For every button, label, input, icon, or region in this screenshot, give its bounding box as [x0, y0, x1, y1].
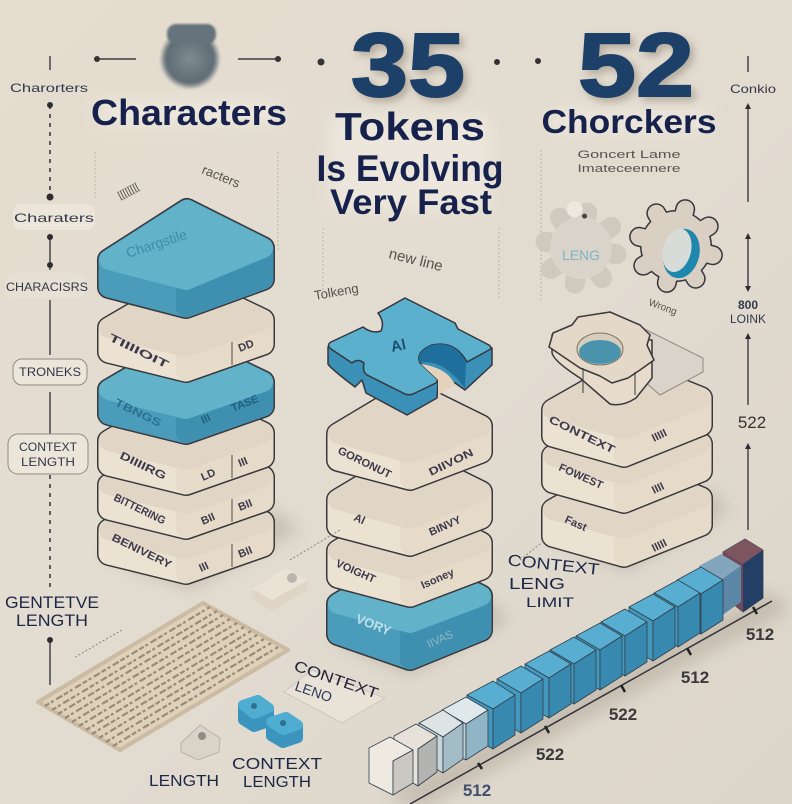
label: context length lower [5, 593, 99, 630]
bar 7 [525, 651, 571, 718]
label: context length: LENGTH [243, 774, 311, 791]
icon: rough gear with leng [539, 197, 624, 290]
heading: tokens is evolving very fast: Tokens [335, 106, 485, 149]
slab 1 blue top: Chargstile [124, 226, 189, 261]
number: 52: 52 [578, 16, 694, 116]
label: characters pill: Charaters [14, 211, 94, 225]
label: 522: 522 [738, 413, 766, 432]
label: 800 loink: LOINK [730, 312, 766, 326]
label card: context leno [284, 658, 385, 723]
icon: blue puzzle piece [328, 298, 492, 415]
annotations above stacks: [[[[[[[[ [116, 181, 141, 202]
slab tan voiight: Isoney [419, 566, 457, 592]
heading: tokens is evolving very fast [316, 106, 504, 222]
axis labels: 512 [463, 781, 491, 800]
slab 2 tan: TIIIIOIT [107, 332, 171, 371]
icon: grey coin [160, 24, 220, 89]
icon: gear with blue hole [630, 200, 722, 292]
label: context length pill: CONTEXT [19, 440, 78, 454]
bar 1 white [369, 737, 413, 795]
panel: right scale column [730, 56, 776, 530]
axis labels: 522 [609, 705, 637, 724]
bar 2 light [394, 724, 437, 786]
bar 5 [467, 681, 515, 749]
label: context length limit: CONTEXT [507, 552, 600, 579]
label: context length pill: LENGTH [21, 455, 75, 469]
bar 9 [576, 623, 622, 690]
label: characters second: CHARACISRS [6, 280, 88, 294]
label: context length limit [507, 552, 600, 610]
slab 2 tan: DD [237, 338, 256, 355]
label: context length lower: LENGTH [16, 611, 88, 630]
label: 800 loink [730, 298, 766, 326]
annotations above stacks: Tolkeng [313, 280, 360, 303]
label: characters pill [13, 204, 95, 230]
axis labels: 512 [746, 625, 774, 644]
label: context length limit: LIMIT [526, 594, 575, 610]
annotations above stacks: racters [200, 162, 243, 191]
bar 13 [677, 567, 723, 634]
icon: white tile [181, 725, 220, 760]
soft floor shadows [100, 490, 790, 804]
chart: context bar row [369, 539, 763, 795]
label: characters top: Charorters [10, 81, 88, 95]
slab fast: Fast [563, 514, 589, 534]
slab tan ai: BINVY [427, 514, 464, 539]
bar 4 pale [442, 697, 488, 760]
slab tan goronut [336, 391, 481, 481]
label: length: LENGTH [149, 773, 219, 790]
label: context length: CONTEXT [232, 756, 322, 773]
label card: context leno: CONTEXT [292, 658, 380, 702]
heading: chorckers: Chorckers [542, 103, 716, 140]
bar 11 [629, 594, 675, 661]
slab tan ai: Al [352, 512, 367, 527]
icon: blue tiles [243, 700, 298, 743]
label: 800 loink: 800 [738, 298, 758, 312]
slab 3 blue [109, 345, 263, 433]
subheading: small caption: Goncert Lame [578, 149, 680, 161]
panel: left scale column [5, 56, 99, 685]
subheading: small caption: Imateceennere [578, 163, 680, 175]
bar 3 pale [419, 710, 463, 773]
bar 8 [550, 637, 596, 704]
slab tan goronut: GORONUT [336, 445, 393, 481]
slab tan ai [338, 457, 481, 545]
slab fast [553, 468, 701, 556]
slab 5 tan: BII [199, 511, 217, 528]
bar 15 dark [723, 539, 763, 612]
slab 6 tan: III [197, 560, 211, 575]
label: context length [232, 756, 322, 791]
number: 35: 35 [351, 16, 465, 116]
slab forest: IIII [650, 481, 666, 497]
slab 3 blue: III [199, 412, 213, 427]
panel: text sheet [38, 603, 288, 750]
bar 12 [654, 580, 700, 647]
slab forest [553, 414, 701, 502]
label: characters second [6, 273, 88, 298]
slab blue very [338, 561, 481, 659]
slab 4 tan: III [237, 455, 250, 470]
annotations above stacks [116, 162, 678, 318]
annotations above stacks: new line [387, 245, 445, 275]
slab fast: IIIII [650, 537, 669, 555]
slab blue very: VORY [354, 611, 394, 639]
connector dashes [75, 530, 545, 657]
icon: gear on stack [549, 312, 654, 405]
label: tokens pill [13, 359, 87, 385]
heading: tokens is evolving very fast: Very Fast [330, 183, 492, 222]
slab 1 blue top [109, 210, 263, 307]
slab tan voiight: VOIGHT [334, 558, 377, 586]
slab tan voiight [334, 508, 481, 596]
stack: middle, puzzle and four slabs [328, 298, 492, 659]
subheading: small caption [578, 149, 680, 175]
icon: rough gear with leng: LENG [562, 247, 600, 263]
bar 6 [497, 666, 543, 733]
label: context short: Conkio [730, 82, 776, 96]
slab 2 tan [107, 283, 263, 371]
slab 6 tan: BII [237, 544, 254, 561]
axis rail [410, 601, 772, 804]
axis labels: 522 [536, 745, 564, 764]
label card: context leno: LENO [293, 678, 334, 705]
annotations above stacks: Wrong [647, 297, 678, 318]
slab tan goronut: DIIVON [427, 447, 476, 479]
slab forest: FOWEST [557, 462, 605, 492]
slab 6 tan [109, 485, 263, 575]
stack: right, gear and three slabs [547, 312, 703, 556]
heading: tokens is evolving very fast: Is Evolving [316, 148, 504, 189]
axis labels [463, 625, 774, 800]
label: context length pill [8, 434, 88, 474]
slab 6 tan: BENIVERY [110, 532, 174, 572]
slab 3 blue: TBNGS [113, 397, 163, 430]
heading: characters: Characters [91, 92, 287, 133]
bar 10 [601, 609, 647, 676]
slab 5 tan [109, 440, 263, 528]
slab context: IIIII [650, 427, 669, 445]
axis labels: 512 [681, 668, 709, 687]
slab 3 blue: TASE [230, 393, 261, 415]
slab context [547, 368, 701, 456]
label: context length lower: GENTETVE [5, 593, 99, 612]
slab 4 tan: DIIIIRG [118, 450, 168, 483]
slab 5 tan: BITTERING [112, 492, 167, 527]
soft heading halos [100, 100, 710, 210]
bar 14 faded [699, 554, 741, 616]
slab 4 tan: LD [199, 467, 218, 484]
label: context length limit: LENG [509, 576, 565, 593]
slab blue very: IIVAS [425, 629, 455, 651]
icon: plate behind gear [610, 312, 703, 395]
slab context: CONTEXT [547, 414, 617, 456]
stack: left, six slabs [107, 210, 263, 575]
icon: small token tile [252, 568, 308, 611]
connector dots along the header [94, 56, 541, 66]
slab 5 tan: BII [237, 497, 254, 514]
guides [95, 150, 541, 300]
label: tokens pill: TRONEKS [19, 365, 81, 379]
slab 4 tan [109, 396, 263, 484]
icon: blue puzzle piece: Al [389, 336, 408, 356]
